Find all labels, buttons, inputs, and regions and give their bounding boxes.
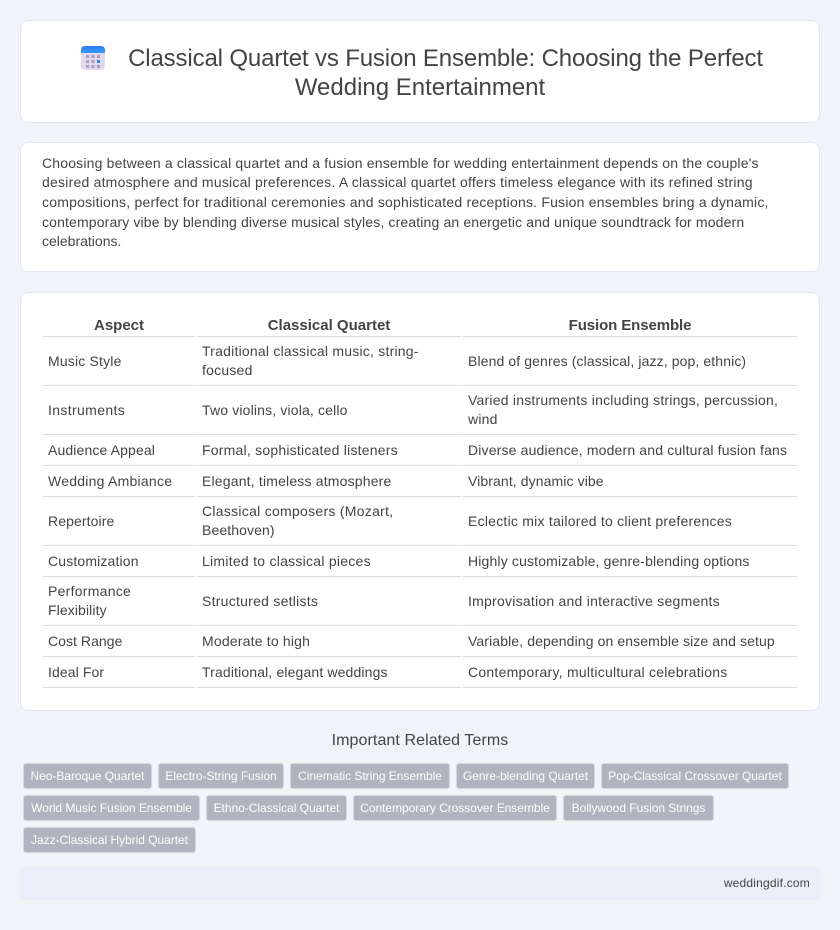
table: comparison: Wedding Ambiance: [48, 473, 172, 489]
tags: related terms: Contemporary Crossover Ensemble: [360, 801, 550, 815]
table: comparison: Elegant, timeless atmosphere: [202, 473, 391, 489]
table: comparison: Traditional, elegant weddings: [202, 664, 388, 680]
table: comparison: Aspect: [94, 317, 144, 334]
panel: title header: [20, 20, 820, 123]
text block: introduction: compositions, perfect for traditional ceremonies and sophisticated receptions. Fusion ensembles bring a dynamic,: [42, 194, 769, 210]
table: comparison: Classical Quartet: [268, 317, 390, 334]
footer source text: weddingdif.com: [724, 876, 810, 890]
table: comparison: [43, 317, 797, 688]
title: Classical Quartet vs Fusion Ensemble: Choosing the Perfect: [128, 45, 763, 72]
table: comparison: Blend of genres (classical, jazz, pop, ethnic): [468, 353, 746, 369]
text block: introduction: [42, 155, 769, 249]
table: comparison: Flexibility: [48, 602, 107, 618]
tags: related terms: Genre-blending Quartet: [463, 769, 588, 783]
icon: calendar: [81, 46, 105, 70]
text block: introduction: celebrations.: [42, 233, 121, 249]
panel: comparison table: [20, 292, 820, 711]
table: comparison: Instruments: [48, 402, 125, 418]
text block: introduction: Choosing between a classical quartet and a fusion ensemble for wedding entertainment depends on the couple's: [42, 155, 759, 171]
table: comparison: focused: [202, 362, 253, 378]
title: [128, 45, 763, 101]
table: comparison: Performance: [48, 583, 131, 599]
tags: related terms: Neo-Baroque Quartet: [30, 769, 144, 783]
table: comparison: Beethoven): [202, 522, 275, 538]
table: comparison: Music Style: [48, 353, 122, 369]
panel: introduction: [20, 142, 820, 272]
table: comparison: Structured setlists: [202, 593, 318, 609]
table: comparison: Audience Appeal: [48, 442, 155, 458]
tags: related terms: World Music Fusion Ensemble: [31, 801, 192, 815]
text block: introduction: desired atmosphere and musical preferences. A classical quartet offers timeless elegance with its refined string: [42, 174, 753, 190]
tags: related terms: Ethno-Classical Quartet: [214, 801, 339, 815]
table: comparison: Traditional classical music, string-: [202, 343, 419, 359]
table: comparison: Customization: [48, 553, 139, 569]
table: comparison: Repertoire: [48, 513, 114, 529]
footer: [20, 866, 820, 900]
text block: introduction: contemporary vibe by blending diverse musical styles, creating an energetic and unique soundtrack for modern: [42, 214, 744, 230]
table: comparison: Fusion Ensemble: [569, 317, 691, 334]
table: comparison: Varied instruments including strings, percussion,: [468, 392, 778, 408]
table: comparison: Cost Range: [48, 633, 122, 649]
tags: related terms: Jazz-Classical Hybrid Quartet: [31, 833, 188, 847]
title: Wedding Entertainment: [295, 74, 545, 101]
table: comparison: Contemporary, multicultural celebrations: [468, 664, 728, 680]
table: comparison: wind: [468, 411, 498, 427]
table: comparison: Two violins, viola, cello: [202, 402, 348, 418]
table: comparison: Formal, sophisticated listeners: [202, 442, 398, 458]
table: comparison: Limited to classical pieces: [202, 553, 371, 569]
tags: related terms: Electro-String Fusion: [165, 769, 277, 783]
table: comparison: Diverse audience, modern and cultural fusion fans: [468, 442, 787, 458]
table: comparison: Improvisation and interactive segments: [468, 593, 720, 609]
table: comparison: Moderate to high: [202, 633, 310, 649]
table: comparison: Eclectic mix tailored to client preferences: [468, 513, 732, 529]
table: comparison: Vibrant, dynamic vibe: [468, 473, 604, 489]
tags: related terms: Bollywood Fusion Strings: [572, 801, 705, 815]
table: comparison: Classical composers (Mozart,: [202, 503, 393, 519]
table: comparison: Ideal For: [48, 664, 104, 680]
table: comparison: Variable, depending on ensemble size and setup: [468, 633, 775, 649]
tags: related terms: Cinematic String Ensemble: [298, 769, 442, 783]
table: comparison: Highly customizable, genre-blending options: [468, 553, 750, 569]
heading: related terms: Important Related Terms: [332, 732, 508, 749]
tags: related terms: Pop-Classical Crossover Quartet: [608, 769, 782, 783]
tags: related terms: [23, 763, 789, 853]
